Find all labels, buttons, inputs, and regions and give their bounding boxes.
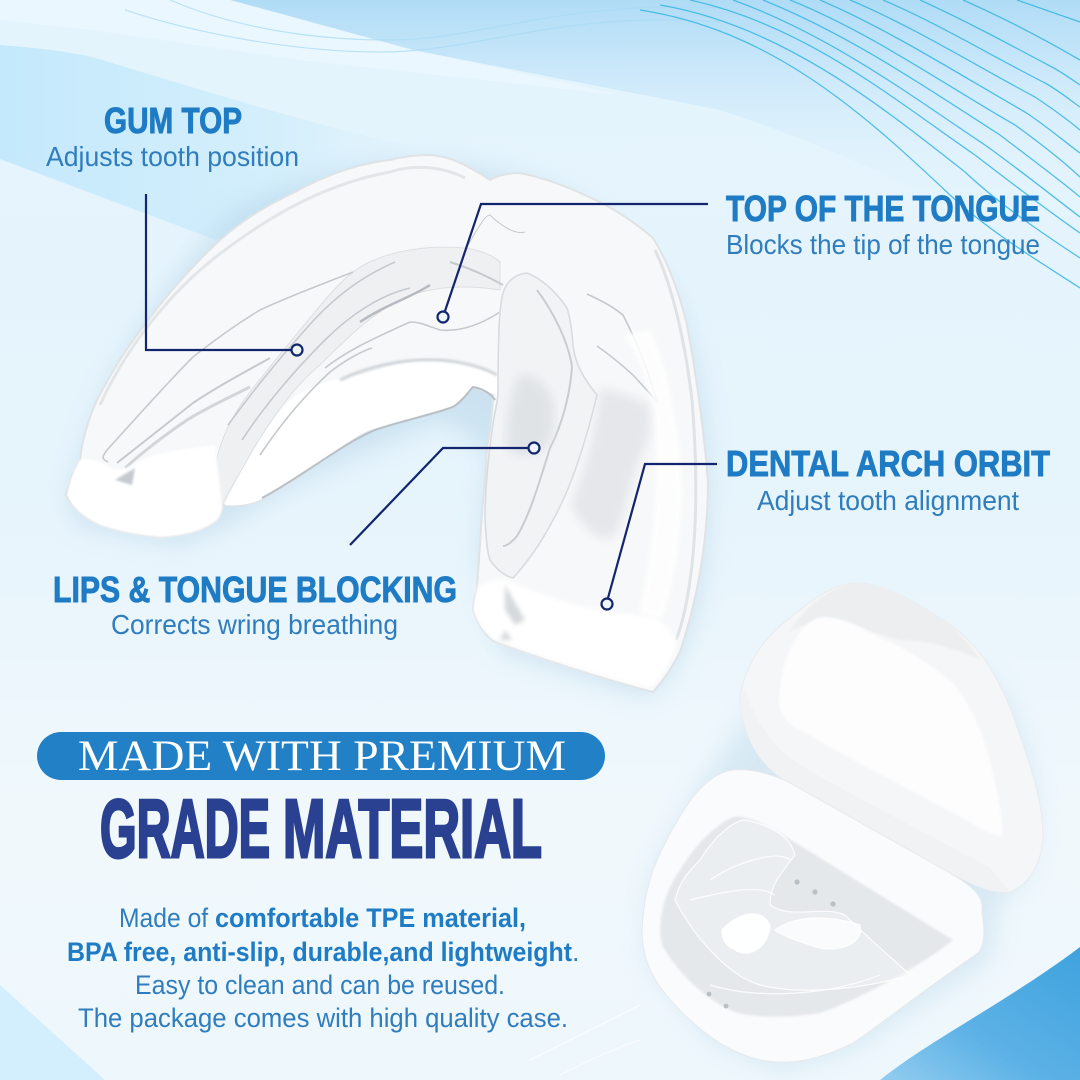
- description text: The package comes with high quality case.: [78, 1003, 568, 1033]
- heading: grade material: MATERIAL: [283, 782, 542, 875]
- right side bright strip: [625, 330, 682, 620]
- description text: .: [572, 937, 580, 967]
- callout line: gum top: [146, 194, 302, 356]
- lip shield inner curve: [503, 290, 572, 546]
- lip shield shading: [507, 375, 554, 455]
- description text: comfortable TPE material,: [215, 903, 526, 933]
- label: dental arch orbit: Adjust tooth alignment: [757, 485, 1019, 516]
- label: dental arch orbit: [726, 443, 1050, 516]
- label: top of the tongue: Blocks the tip of the tongue: [726, 229, 1040, 260]
- left foot: [68, 445, 222, 537]
- guard shadow: [70, 162, 708, 695]
- heading: grade material: [100, 782, 542, 875]
- small guard in case: [675, 820, 910, 994]
- channel grooves: [103, 215, 657, 468]
- heading: grade material: GRADE: [100, 782, 270, 875]
- case base: [642, 770, 984, 1062]
- callout lines with markers: [146, 194, 717, 610]
- right outer rim: [655, 250, 696, 640]
- body lower edge: [262, 387, 495, 498]
- back inner shading: [570, 388, 650, 539]
- outer rim highlight: [100, 167, 465, 405]
- label: gum top: [46, 100, 299, 172]
- decorative curved lines: [640, 0, 1080, 288]
- case tray: [660, 817, 953, 1017]
- case lid: [740, 583, 1043, 892]
- outer body: [66, 155, 708, 692]
- lid cavity: [779, 617, 1003, 837]
- label: lips and tongue blocking: LIPS & TONGUE BLOCKING: [53, 569, 457, 610]
- label: top of the tongue: [726, 188, 1040, 260]
- lid top band: [790, 583, 980, 660]
- lip shield: [485, 273, 597, 578]
- callout line: dental arch: [602, 464, 717, 610]
- front body smudge: [340, 360, 497, 380]
- right foot smudges: [500, 585, 525, 640]
- product: clear mouthguard: [66, 155, 708, 695]
- lid wall band: [740, 690, 1010, 892]
- description text: Easy to clean and can be reused.: [135, 970, 505, 1000]
- label: lips and tongue blocking: [53, 569, 457, 640]
- case shadow: [645, 624, 1038, 1070]
- label: lips and tongue blocking: Corrects wring breathing: [111, 609, 398, 640]
- left foot smudge: [115, 468, 135, 485]
- callout line: top of the tongue: [438, 204, 708, 322]
- banner: made with premium: MADE WITH PREMIUM: [78, 733, 566, 780]
- label: gum top: Adjusts tooth position: [46, 141, 299, 172]
- grey rim band: [213, 247, 500, 505]
- description text: Made of: [119, 903, 215, 933]
- label: gum top: GUM TOP: [104, 100, 242, 141]
- product: storage case: [642, 583, 1043, 1070]
- vent holes: [707, 879, 836, 1008]
- front body white: [225, 360, 497, 505]
- description text: [67, 903, 580, 1033]
- description text: BPA free, anti-slip, durable,and lightweight: [67, 937, 572, 967]
- callout line: lips and tongue: [350, 442, 540, 545]
- right foot: [474, 580, 677, 688]
- bottom right blue corner: [880, 947, 1080, 1080]
